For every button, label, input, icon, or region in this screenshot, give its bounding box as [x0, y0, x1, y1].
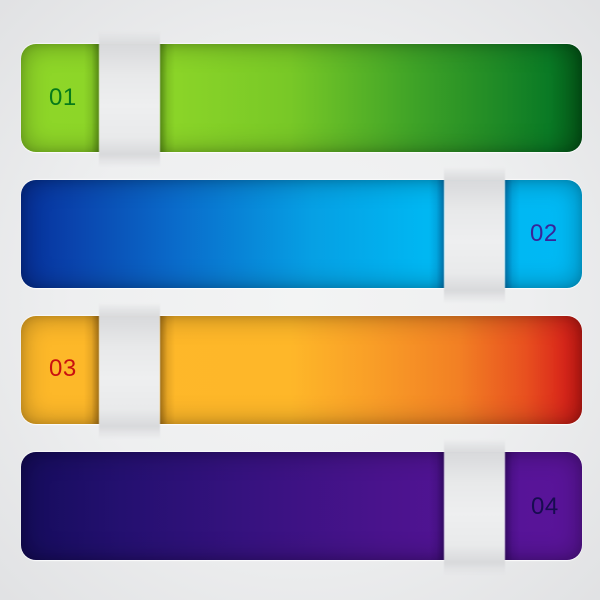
panel: banner 02 blue — [21, 180, 582, 288]
shadow left of strap 01 — [84, 44, 99, 152]
paper strap on banner 04 — [444, 439, 505, 575]
shadow right of strap 02 — [505, 180, 520, 288]
label 01: 01 — [49, 84, 77, 111]
panel: banner 03 orange — [21, 316, 582, 424]
paper strap on banner 03 — [99, 303, 160, 439]
paper strap on banner 01 — [99, 31, 160, 167]
shadow left of strap 02 — [429, 180, 444, 288]
label 02: 02 — [530, 220, 558, 247]
banner 01 edge shading — [21, 44, 582, 152]
banner 04 edge shading — [21, 452, 582, 560]
paper strap on banner 02 — [444, 167, 505, 303]
panel: banner 01 green — [21, 44, 582, 152]
shadow right of strap 04 — [505, 452, 520, 560]
shadow right of strap 03 — [160, 316, 175, 424]
panel: banner 04 purple — [21, 452, 582, 560]
label 04: 04 — [531, 493, 559, 520]
banner 02 edge shading — [21, 180, 582, 288]
shadow right of strap 01 — [160, 44, 175, 152]
label 03: 03 — [49, 355, 77, 382]
shadow left of strap 04 — [429, 452, 444, 560]
shadow left of strap 03 — [84, 316, 99, 424]
banner 03 edge shading — [21, 316, 582, 424]
